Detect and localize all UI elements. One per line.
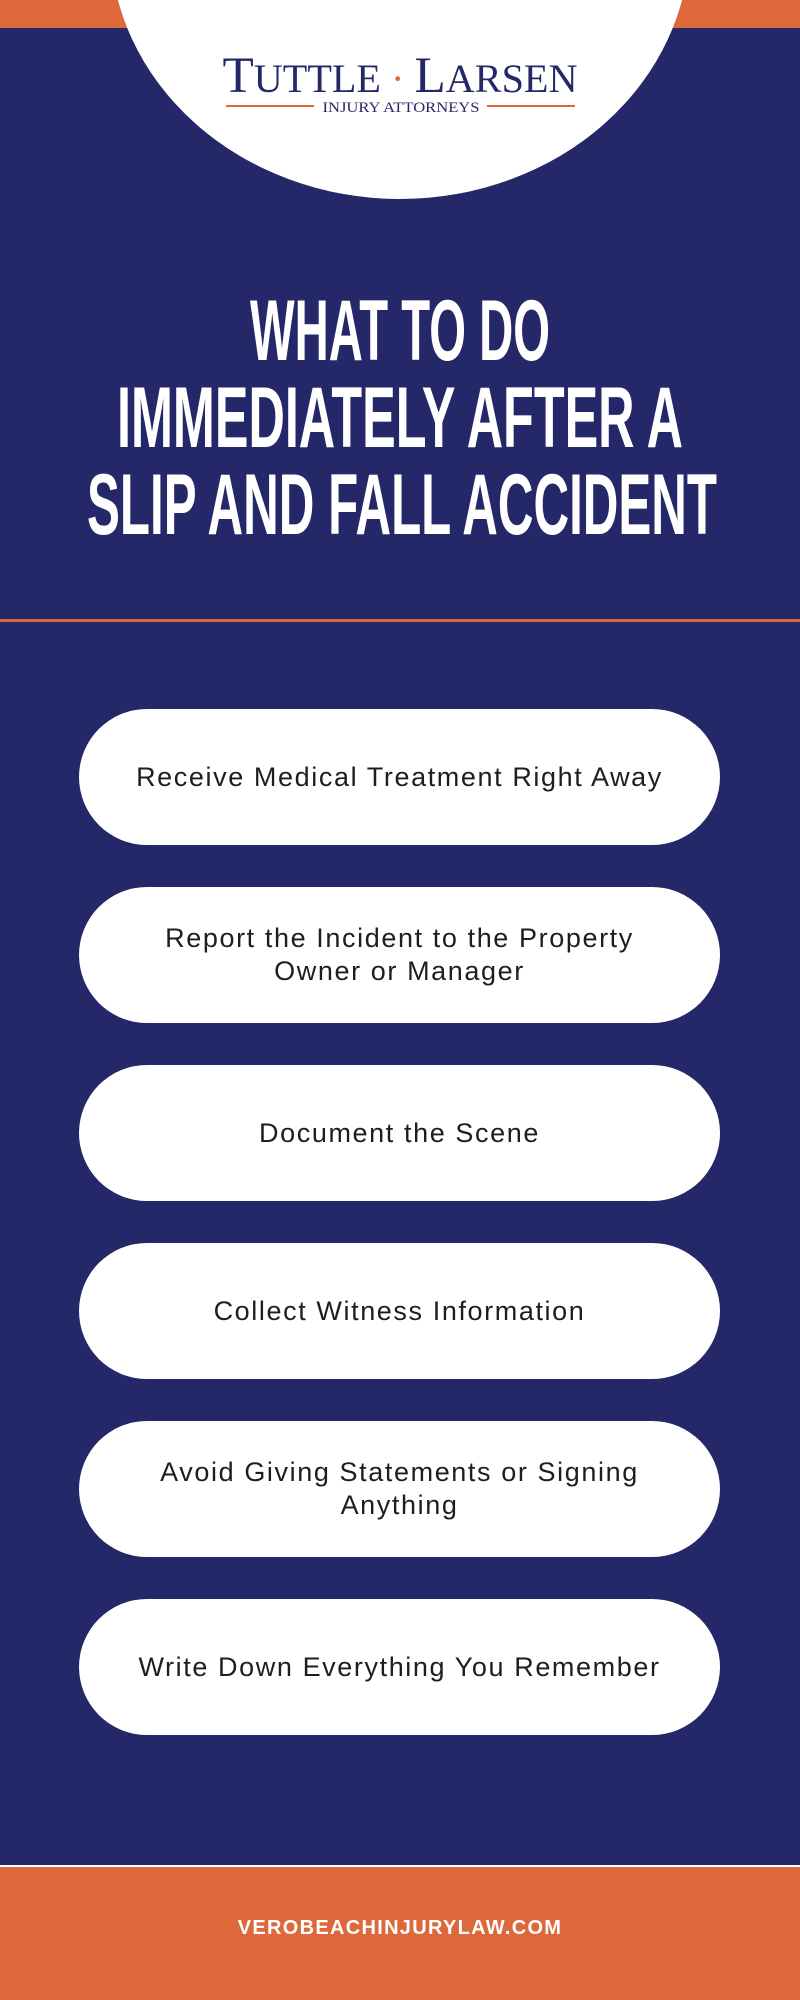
pill: step 4 <box>79 1243 720 1379</box>
pill: step 1 <box>79 709 720 845</box>
logo: TUTTLE · LARSEN <box>222 48 578 104</box>
pill: step 5: Avoid Giving Statements or Signing Anything <box>160 1457 639 1520</box>
footer url: VEROBEACHINJURYLAW.COM <box>238 1917 562 1939</box>
logo ellipse <box>110 0 690 199</box>
pill: step 3: Document the Scene <box>259 1118 540 1148</box>
title <box>87 283 717 553</box>
header background with logo ellipse <box>0 0 800 622</box>
pill: step 2: Report the Incident to the Property Owner or Manager <box>165 923 634 986</box>
title: WHAT TO DO <box>250 283 550 379</box>
logo: INJURY ATTORNEYS <box>322 100 480 116</box>
pill: step 2 <box>79 887 720 1023</box>
pill: step 6 <box>79 1599 720 1735</box>
pill: step 6: Write Down Everything You Remember <box>138 1652 661 1682</box>
pill: step 5 <box>79 1421 720 1557</box>
pill: step 1: Receive Medical Treatment Right Away <box>136 762 663 792</box>
pill: step 4: Collect Witness Information <box>214 1296 585 1326</box>
footer <box>0 1865 800 2000</box>
pill: step 3 <box>79 1065 720 1201</box>
